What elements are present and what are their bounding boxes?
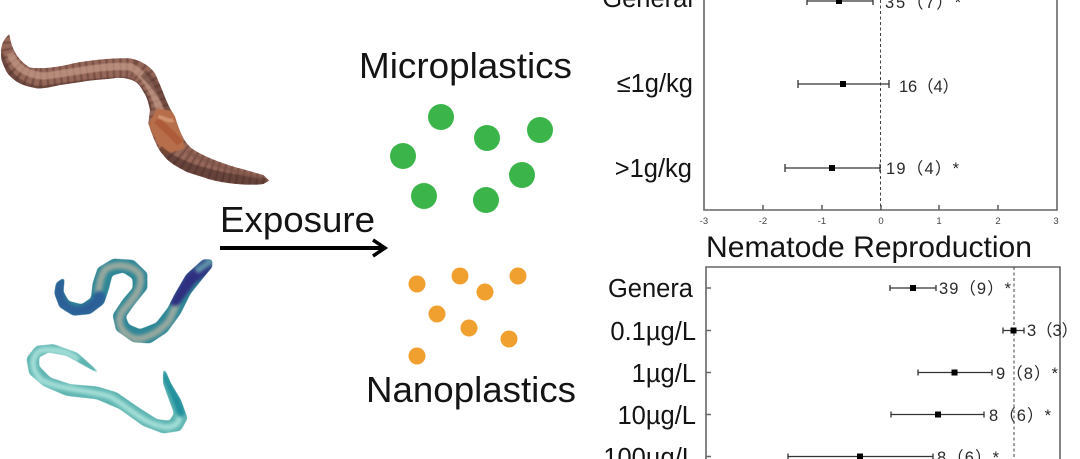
row: Genera: 39（9）* (939, 279, 1012, 298)
x axis labels: -2 (759, 216, 767, 227)
row: 1µg/L (632, 360, 1059, 388)
row: 100µg/L (603, 444, 1000, 459)
heading: Microplastics: Microplastics (359, 45, 572, 86)
panel: top forest plot (602, 0, 1059, 227)
row: 10µg/L: 10µg/L (617, 402, 696, 430)
icon: pale teal nematode (27, 345, 187, 433)
heading: Nematode Reproduction: Nematode Reproduction (706, 231, 1032, 264)
row: 10µg/L (617, 402, 1052, 430)
row: 0.1µg/L: 0.1µg/L (610, 318, 696, 346)
x axis labels: -3 (700, 216, 708, 227)
row: 0.1µg/L (610, 318, 1078, 346)
row: >1g/kg (615, 155, 960, 183)
icon: earthworm (1, 34, 269, 185)
arrow: exposure (220, 240, 385, 256)
green microplastic particles (390, 104, 553, 213)
orange nanoplastic particles (408, 268, 526, 364)
icon: blue-grey nematode (55, 259, 212, 343)
x axis labels: -1 (818, 216, 826, 227)
row: ≤1g/kg (617, 70, 959, 98)
row: >1g/kg: >1g/kg (615, 155, 692, 183)
row: Genera (608, 275, 1012, 303)
row: >1g/kg: 19（4）* (886, 159, 960, 178)
x axis labels: 1 (936, 216, 942, 227)
row: ≤1g/kg: 16（4） (899, 77, 959, 96)
x axis labels: 0 (878, 216, 884, 227)
row: 1µg/L: 1µg/L (632, 360, 696, 388)
label: Exposure: Exposure (220, 199, 375, 240)
x axis labels: 2 (995, 216, 1001, 227)
row: 10µg/L: 8（6）* (989, 406, 1052, 425)
panel: bottom forest plot (603, 267, 1078, 459)
row: General (602, 0, 962, 13)
x axis labels (700, 216, 1059, 227)
heading: Nanoplastics: Nanoplastics (366, 369, 576, 410)
row: ≤1g/kg: ≤1g/kg (617, 70, 693, 98)
row: 1µg/L: 9（8）* (996, 364, 1059, 383)
x axis labels: 3 (1053, 216, 1059, 227)
row: Genera: Genera (608, 275, 694, 303)
row: 0.1µg/L: 3（3） (1027, 321, 1078, 340)
